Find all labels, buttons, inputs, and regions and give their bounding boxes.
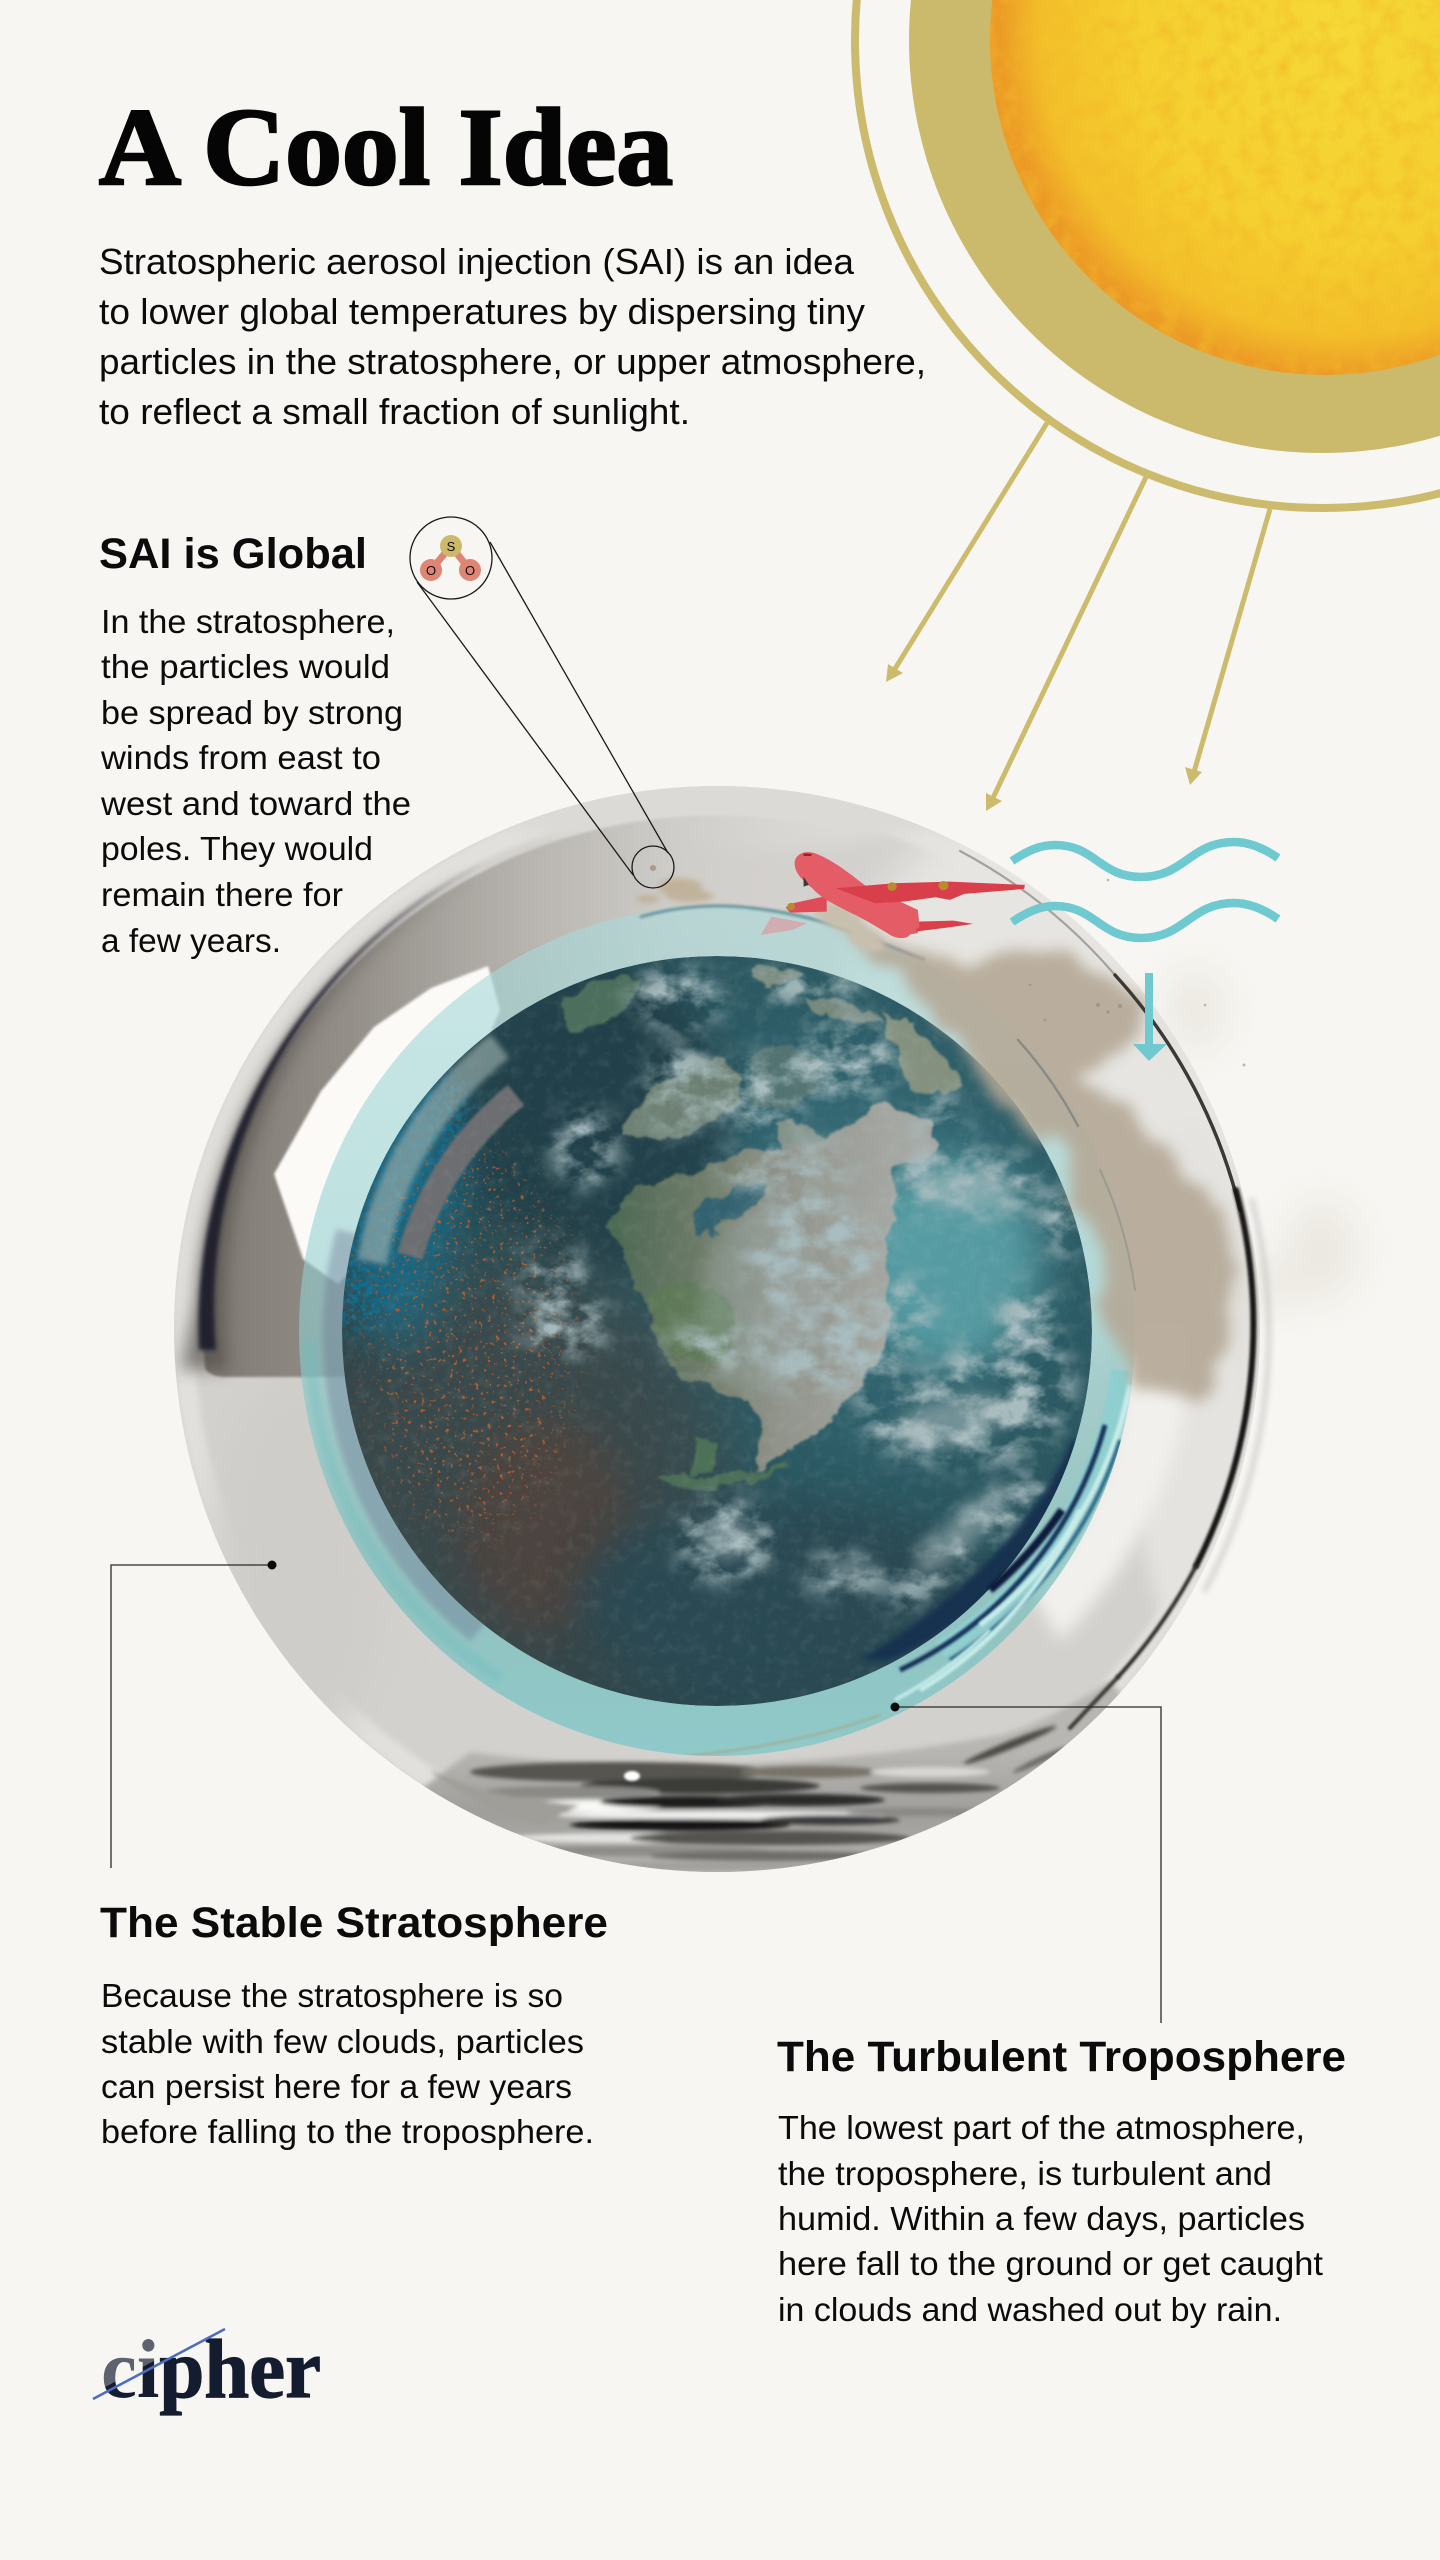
particle specks	[305, 1051, 575, 1540]
teal atmosphere ring	[299, 906, 1135, 1756]
text block: introduction	[99, 241, 926, 432]
glass sphere	[174, 750, 1260, 1880]
text block: The Stable Stratosphere: can persist here for a few years	[101, 2069, 572, 2106]
heading: The Turbulent Troposphere: The Turbulent Troposphere	[777, 2033, 1346, 2081]
main plume	[835, 918, 1240, 1392]
arrow: sunlight ray middle	[986, 477, 1146, 811]
text block: SAI is Global	[100, 604, 411, 960]
navy edge crescent	[860, 1440, 1095, 1660]
glass reflection band	[174, 817, 724, 1380]
earth reflected bands	[372, 1046, 516, 1262]
heading: SAI is Global: SAI is Global	[99, 530, 367, 578]
text block: The Turbulent Troposphere: in clouds and washed out by rain.	[778, 2292, 1282, 2329]
text block: The Turbulent Troposphere: the troposphere, is turbulent and	[778, 2156, 1272, 2193]
icon: SO2 molecule: S	[447, 539, 456, 554]
text block: SAI is Global: poles. They would	[101, 831, 373, 868]
title: A Cool Idea	[99, 86, 673, 208]
text block: introduction: to lower global temperatures by dispersing tiny	[99, 291, 866, 332]
callout: stratosphere leader line	[111, 1560, 276, 1868]
glass body	[174, 786, 1260, 1788]
heading: The Stable Stratosphere: The Stable Stratosphere	[100, 1899, 608, 1947]
callout: molecule magnifier	[410, 517, 674, 888]
text block: SAI is Global: the particles would	[101, 649, 390, 686]
icon: turbulence waves	[1012, 842, 1278, 938]
earth ocean shading	[310, 960, 1040, 1700]
logo: cipher: cipher	[101, 2323, 321, 2416]
arrow: sunlight ray right	[1185, 509, 1270, 785]
smoke droplets	[1029, 879, 1246, 1066]
callout: troposphere leader line	[890, 1702, 1161, 2023]
text block: SAI is Global: west and toward the	[100, 786, 411, 823]
stratosphere smoke near lens	[636, 878, 714, 903]
text block: introduction: particles in the stratosphere, or upper atmosphere,	[99, 341, 926, 382]
text block: SAI is Global: be spread by strong	[101, 695, 403, 732]
arrow: sunlight ray left	[886, 423, 1047, 682]
aerosol smoke plume	[636, 878, 1356, 1392]
text block: introduction: Stratospheric aerosol injection (SAI) is an idea	[99, 241, 855, 282]
icon: SO2 molecule: O	[465, 563, 475, 578]
glass outer rim	[960, 851, 1269, 1728]
faint outer haze	[1167, 970, 1356, 1303]
text block: SAI is Global: remain there for	[101, 877, 343, 914]
icon: SO2 molecule: O	[426, 563, 436, 578]
text block: introduction: to reflect a small fraction of sunlight.	[99, 391, 690, 432]
text block: SAI is Global: a few years.	[101, 923, 281, 960]
earth	[305, 956, 1095, 1706]
bottom lens streaks	[420, 1680, 1140, 1880]
arrow: particles falling	[1133, 973, 1167, 1061]
text block: SAI is Global: In the stratosphere,	[101, 604, 395, 641]
exhaust under plane	[808, 894, 888, 958]
text block: The Turbulent Troposphere: humid. Within a few days, particles	[778, 2201, 1305, 2238]
clouds	[518, 965, 1088, 1615]
glass window highlight	[274, 966, 500, 1284]
icon: sun with halo rings	[855, 0, 1440, 508]
land and sea texture	[342, 956, 1092, 1706]
text block: The Turbulent Troposphere	[778, 2110, 1324, 2329]
turbulent lower right streaks	[682, 1368, 1131, 1756]
text block: SAI is Global: winds from east to	[100, 740, 381, 777]
text block: The Stable Stratosphere	[101, 1978, 594, 2151]
airplane	[761, 852, 1025, 938]
text block: The Stable Stratosphere: Because the stratosphere is so	[101, 1978, 563, 2015]
text block: The Turbulent Troposphere: The lowest part of the atmosphere,	[778, 2110, 1305, 2147]
text block: The Stable Stratosphere: before falling to the troposphere.	[101, 2114, 594, 2151]
text block: The Stable Stratosphere: stable with few clouds, particles	[101, 2024, 584, 2061]
atmosphere upper boundary line	[640, 906, 925, 960]
icon: SO2 molecule	[420, 535, 481, 581]
solid cloud highlights	[698, 1170, 1023, 1585]
continents	[564, 965, 960, 1491]
text block: The Turbulent Troposphere: here fall to the ground or get caught	[778, 2246, 1324, 2283]
